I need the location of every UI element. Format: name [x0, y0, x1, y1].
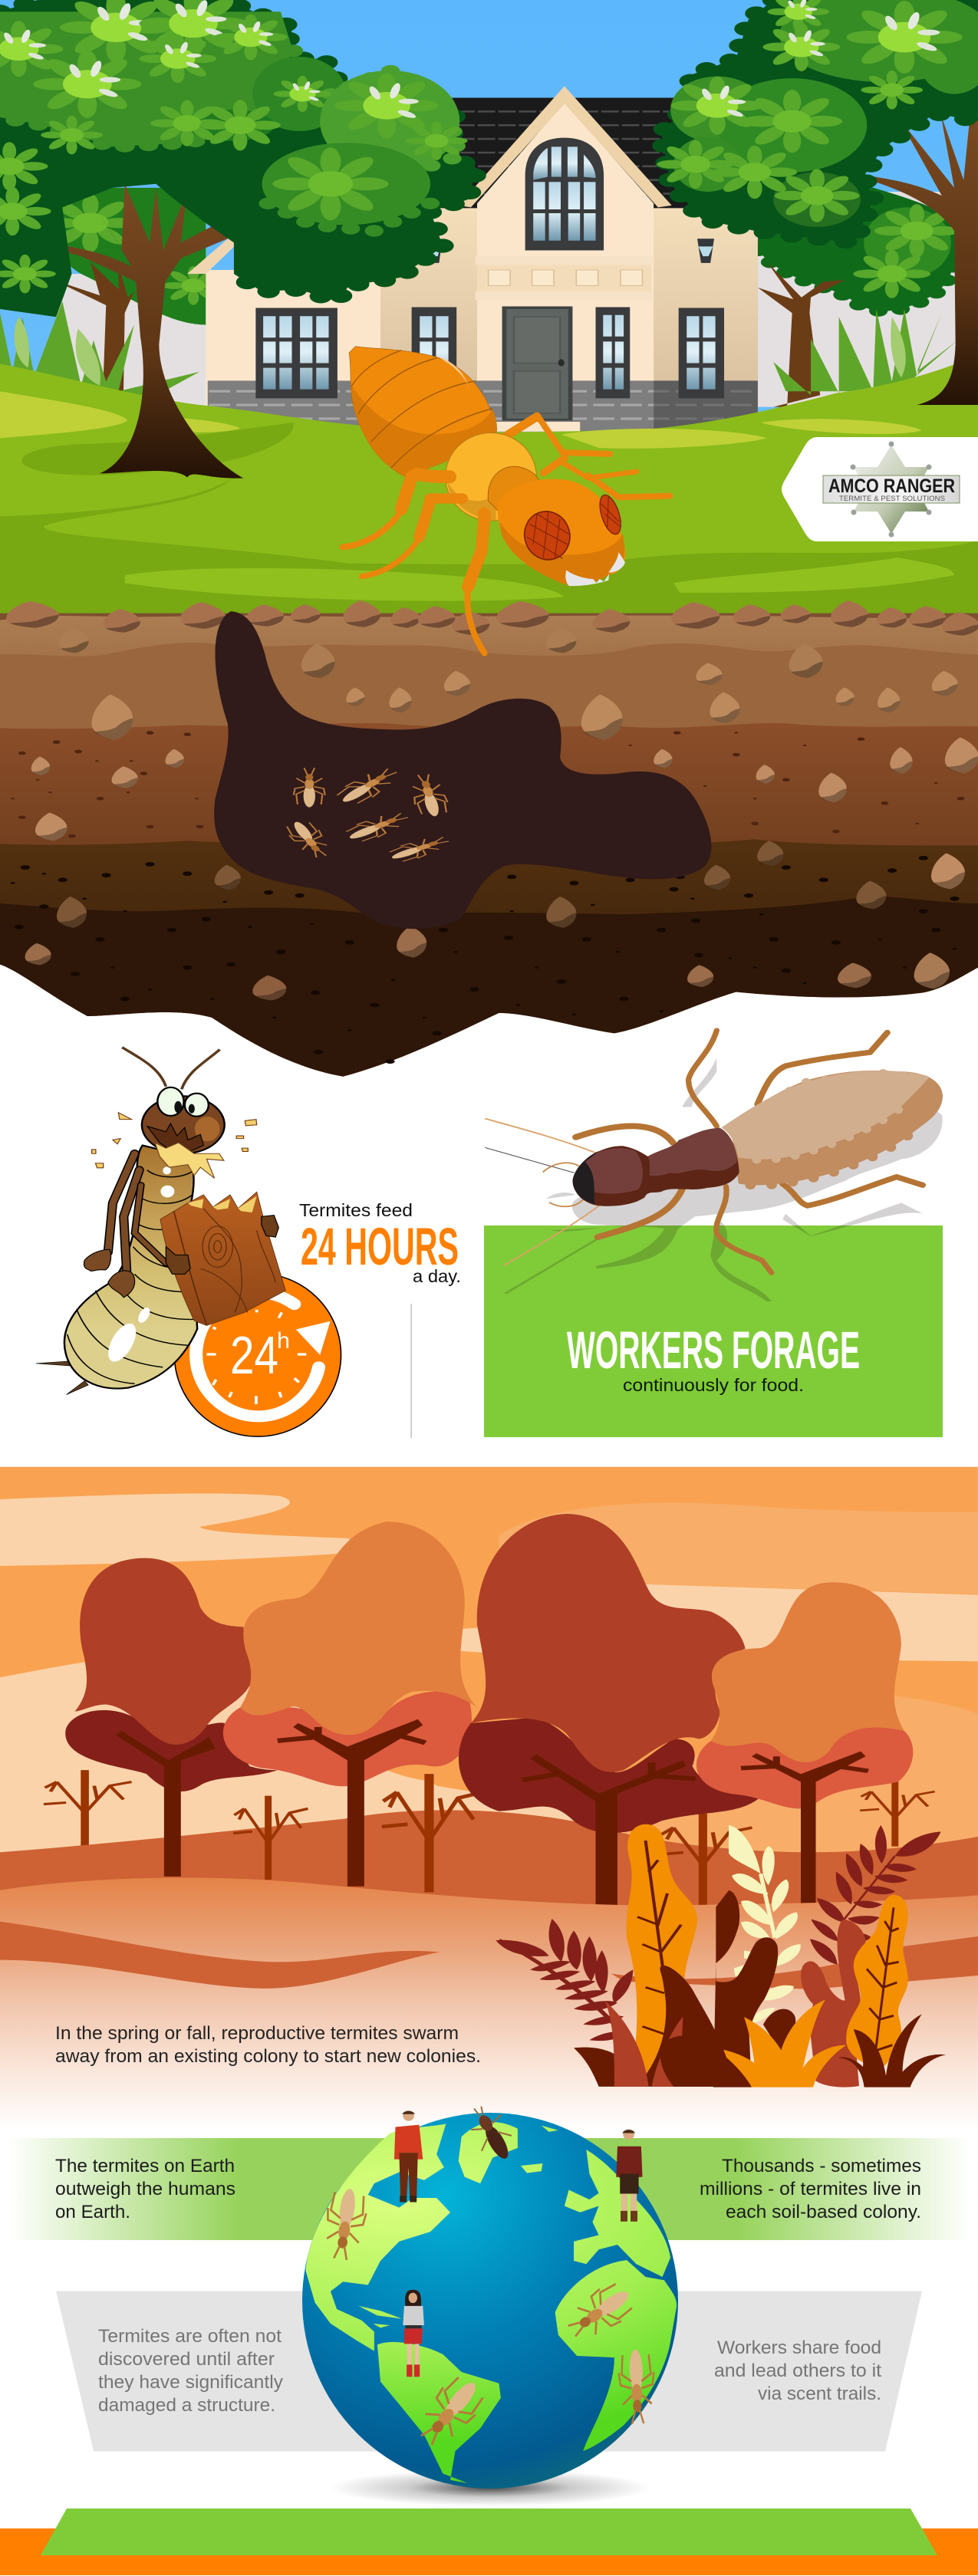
text: workers share food: via scent trails. [758, 2384, 881, 2404]
footer green platform [41, 2509, 937, 2555]
panel: gray right [583, 2291, 922, 2451]
globe termites [321, 2098, 655, 2454]
text: often not discovered [98, 2326, 283, 2416]
tail spikes [36, 1361, 88, 1395]
orange spiked plant [713, 1999, 846, 2087]
clock label 24h: 24 [230, 1325, 278, 1385]
stat: termites feed 24 hours a day [299, 1200, 461, 1286]
soil rocks [25, 628, 978, 1001]
text: swarm fact: away from an existing colony to start new colonies. [55, 2046, 481, 2067]
globe illustration [302, 2098, 678, 2489]
cartoon termite eating wood with 24h clock [36, 1048, 341, 1436]
stat: termites feed 24 hours a day: 24 HOURS [301, 1217, 459, 1276]
head [498, 479, 625, 586]
orange veined leaf [846, 1895, 908, 2068]
surface pebbles [0, 600, 978, 636]
soil speckles [12, 733, 961, 1061]
head [142, 1087, 225, 1178]
text: thousands: millions - of termites live in [700, 2179, 921, 2199]
thorax shade [447, 481, 496, 521]
mandibles [565, 552, 625, 586]
hands on wood [166, 1216, 278, 1274]
abdomen [721, 1071, 943, 1185]
sheriff star [854, 445, 929, 534]
24h clock badge [174, 1273, 341, 1436]
door [496, 306, 580, 432]
wood crumbs [92, 1113, 257, 1168]
left orange leaf [574, 1824, 739, 2087]
lamps [428, 239, 714, 263]
legs [576, 1031, 923, 1273]
back legs [506, 416, 670, 497]
subheading: continuously for food. [623, 1375, 804, 1395]
cream sprig [729, 1825, 801, 2022]
windows [255, 308, 724, 398]
termite colony in tunnel [282, 765, 455, 864]
continents [305, 2122, 677, 2483]
left fern [496, 1919, 633, 2044]
text: swarm fact: In the spring or fall, reproductive termites swarm [55, 2023, 459, 2044]
logo badge [782, 437, 978, 541]
dark antenna [485, 1147, 575, 1173]
autumn forest scene [0, 1467, 978, 2130]
tree one [65, 1558, 278, 1877]
thorax [446, 433, 536, 521]
surface rocks band [0, 614, 978, 1077]
text: thousands [700, 2156, 921, 2222]
text: often not discovered: Termites are often not [98, 2326, 282, 2347]
text: thousands: Thousands - sometimes [722, 2156, 921, 2176]
wing walls [187, 207, 758, 407]
eyes [519, 492, 625, 566]
panel: termites outweigh humans [8, 2138, 391, 2240]
termite body [64, 1146, 197, 1389]
text: swarm fact [55, 2023, 481, 2067]
globe shadow [329, 2469, 651, 2506]
maroon fern [810, 1825, 941, 1965]
thorax and head [573, 1128, 739, 1206]
palps [543, 1163, 584, 1206]
central gable [459, 86, 672, 383]
star tips [853, 444, 929, 535]
ribbon right [611, 1936, 978, 1989]
mid hill [0, 1810, 978, 1926]
worker termite illustration [485, 1031, 943, 1301]
decorative band [476, 256, 654, 300]
text: often not discovered: damaged a structure. [98, 2395, 275, 2416]
stat: termites feed 24 hours a day: Termites feed [299, 1200, 413, 1220]
person: woman in red skirt [403, 2290, 424, 2377]
saplings front [233, 1774, 752, 1905]
autumn foreground plants [496, 1824, 946, 2087]
termite on the lawn [343, 347, 670, 653]
dark lobed plant [713, 1890, 778, 2087]
divider [410, 1304, 412, 1438]
tree: left foreground [0, 0, 477, 479]
panel: workers forage [484, 1225, 943, 1437]
text: outweigh: outweigh the humans [55, 2179, 235, 2199]
person: man in suspenders [616, 2129, 642, 2222]
clock label 24h: h [277, 1328, 290, 1354]
front legs [343, 474, 485, 653]
stat: termites feed 24 hours a day: a day. [413, 1266, 461, 1286]
text: workers share food: Workers share food [717, 2337, 881, 2358]
text: thousands: each soil-based colony. [726, 2202, 921, 2222]
bushes [0, 301, 957, 399]
text: often not discovered: discovered until after [98, 2349, 275, 2370]
back wall [56, 192, 957, 407]
cast shadow [504, 1058, 943, 1301]
sky [0, 1467, 978, 1891]
canopy leaf clusters [60, 0, 172, 63]
tree: small right back tree [758, 184, 960, 407]
panel: gray left [56, 2291, 399, 2451]
text: outweigh [55, 2156, 235, 2222]
text: outweigh: on Earth. [55, 2202, 130, 2222]
wood block [160, 1192, 285, 1326]
tree three [459, 1514, 764, 1905]
house [187, 86, 758, 432]
person: man in plaid [394, 2110, 423, 2202]
background scene: house and lawn [0, 0, 978, 614]
logo name: AMCO RANGER [828, 475, 955, 497]
clouds [0, 1494, 978, 1887]
foreground hill [0, 1877, 978, 2130]
termite tunnel [214, 611, 711, 929]
right plants [713, 1825, 946, 2087]
stone base [208, 380, 758, 432]
footer orange band [0, 2528, 978, 2575]
right dark spikes [838, 2015, 946, 2087]
text: workers share food [714, 2337, 881, 2404]
saplings back [44, 1770, 935, 1847]
antennae [485, 1119, 599, 1265]
red lobed plant [801, 1920, 865, 2087]
soil strata [0, 643, 978, 1077]
canopy mid-green masses [0, 12, 293, 146]
tree: small left back tree [44, 188, 224, 391]
tree four [696, 1582, 913, 1904]
roof [436, 98, 696, 208]
abdomen [349, 347, 497, 477]
text: outweigh: The termites on Earth [55, 2156, 235, 2176]
hands [84, 1249, 135, 1298]
neck [488, 466, 539, 516]
text: often not discovered: they have significantly [98, 2372, 283, 2393]
arched window [525, 138, 604, 251]
ribbon left [0, 1922, 440, 1989]
tree: right foreground [657, 0, 978, 405]
underground soil layers [0, 600, 978, 1077]
logo tagline: TERMITE & PEST SOLUTIONS [839, 495, 945, 503]
dark bud [763, 2009, 795, 2053]
arms [108, 1153, 166, 1274]
antennae [122, 1048, 220, 1089]
text: workers share food: and lead others to it [714, 2361, 881, 2381]
lawn [0, 354, 978, 614]
logo plate [823, 475, 960, 503]
tree two [223, 1522, 477, 1887]
panel: millions in colony [583, 2138, 970, 2240]
